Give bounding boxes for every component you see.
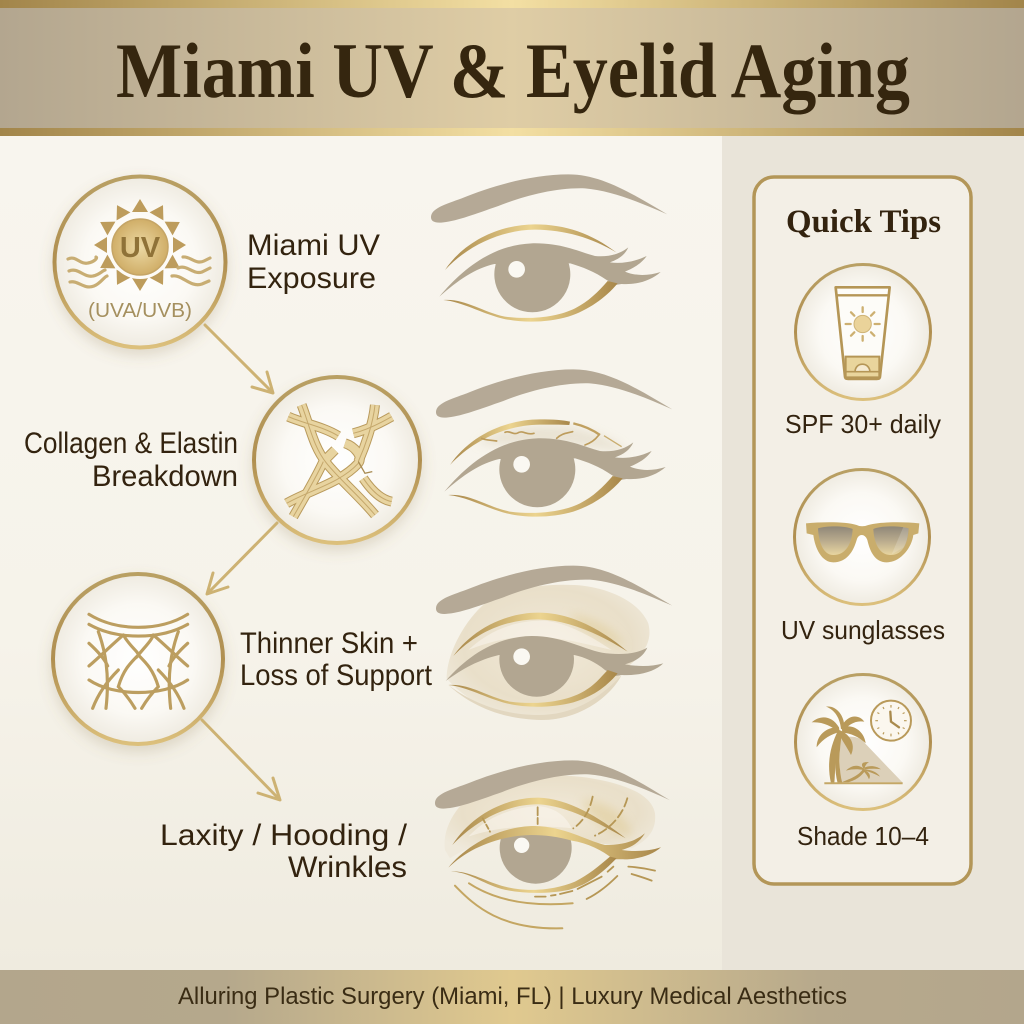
panel: quick tips xyxy=(754,177,971,884)
footer text: Alluring Plastic Surgery (Miami, FL) | Luxury Medical Aesthetics xyxy=(178,983,847,1010)
arrow 3 xyxy=(202,720,280,800)
label: Thinner Skin + Loss of Support: Loss of Support xyxy=(240,659,433,692)
eye 2: early collagen damage xyxy=(436,369,672,517)
eye 3: thinner skin and lost support xyxy=(436,566,672,720)
footer band xyxy=(0,970,1024,1024)
tip 3 icon: palm shade and clock xyxy=(796,674,930,810)
tip 3 label: Shade 10–4 xyxy=(797,821,929,851)
header band xyxy=(0,0,1024,136)
label: Thinner Skin + Loss of Support: Thinner Skin + xyxy=(240,627,418,660)
title: Miami UV & Eyelid Aging xyxy=(116,27,910,114)
label: Laxity / Hooding / Wrinkles: Wrinkles xyxy=(288,851,407,884)
eye 4: laxity, hooding and wrinkles xyxy=(435,760,670,928)
tip 1 icon: sunscreen tube xyxy=(796,264,930,400)
step 3 icon: weakened support net xyxy=(53,574,223,744)
step 1 icon: UV sun xyxy=(54,176,226,348)
heat waves xyxy=(68,257,210,287)
label: Collagen & Elastin Breakdown: Breakdown xyxy=(92,460,238,493)
sun rays xyxy=(94,199,186,291)
label: Miami UV Exposure: Exposure xyxy=(247,262,376,295)
background: right column xyxy=(722,136,1024,970)
step 2 icon: broken collagen fibers xyxy=(254,377,420,543)
label: Collagen & Elastin Breakdown: Collagen & Elastin xyxy=(24,427,238,460)
panel heading: Quick Tips xyxy=(786,204,941,240)
tip 2 icon: sunglasses xyxy=(794,470,930,604)
arrow 2 xyxy=(207,523,277,594)
eye 1: healthy xyxy=(431,174,667,322)
background: left paper xyxy=(0,136,722,970)
step 1 icon: UV sun: UV xyxy=(120,232,161,264)
label: Miami UV Exposure: Miami UV xyxy=(247,229,380,262)
label: Miami UV Exposure xyxy=(247,229,380,295)
label: Laxity / Hooding / Wrinkles: Laxity / Hooding / xyxy=(160,819,408,852)
tip 1 label: SPF 30+ daily xyxy=(785,409,941,439)
label: Thinner Skin + Loss of Support xyxy=(240,627,433,692)
step 1 icon: UV sun: (UVA/UVB) xyxy=(88,300,192,322)
label: Collagen & Elastin Breakdown xyxy=(24,427,238,493)
tip 2 label: UV sunglasses xyxy=(781,615,945,645)
arrow 1 xyxy=(205,325,273,393)
label: Laxity / Hooding / Wrinkles xyxy=(160,819,408,884)
